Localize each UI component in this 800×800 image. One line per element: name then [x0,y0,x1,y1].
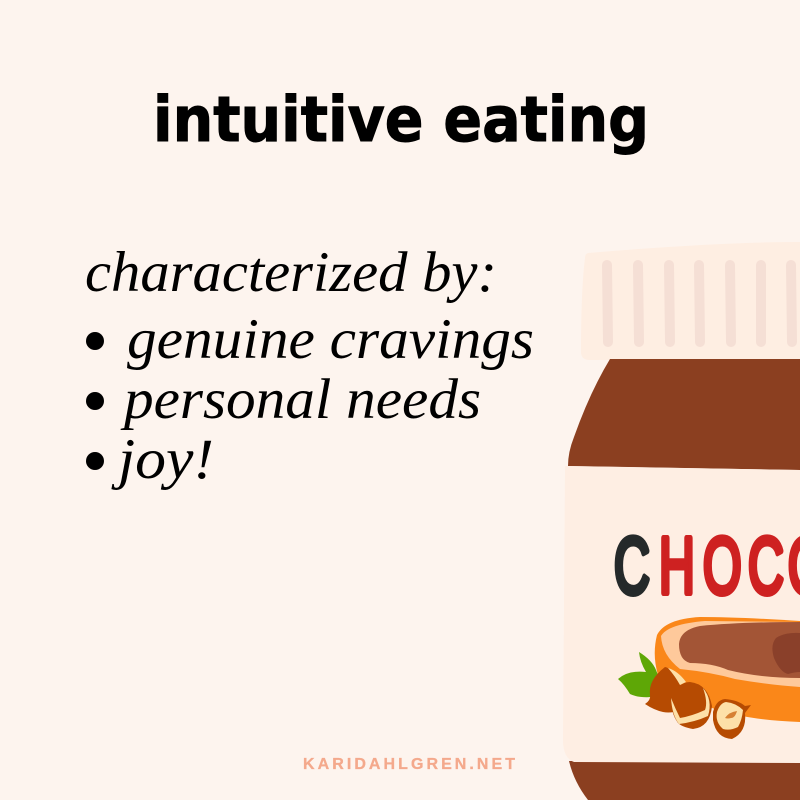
title: intuitive eating [153,83,649,156]
text block: characterized by list [85,241,534,491]
red letters: H [659,522,695,611]
illustration: chocolate spread jar [563,242,800,800]
jar label brand text [614,522,800,611]
hazelnut middle [672,682,712,729]
list item: personal needs: personal needs [120,368,481,431]
jar body: upper chocolate [568,359,800,470]
hazelnuts [645,667,751,739]
list item: genuine cravings: genuine cravings [127,308,534,371]
hazelnut right [713,699,751,739]
leaves [618,652,660,697]
red letters: O [703,522,742,611]
jar body: lower chocolate [569,761,800,800]
footer website credit: KARIDAHLGREN.NET [303,756,515,773]
jar label [563,466,800,763]
hazelnut left [645,667,681,712]
jar lid [581,242,800,360]
letter C dark: C [614,522,650,611]
list item: joy [86,428,214,491]
toast with chocolate spread [655,617,800,722]
red letters [659,522,800,611]
lid ribs [607,265,792,342]
list heading: characterized by: [85,241,497,304]
list item: joy: joy! [110,428,214,491]
red letters: C [748,522,784,611]
